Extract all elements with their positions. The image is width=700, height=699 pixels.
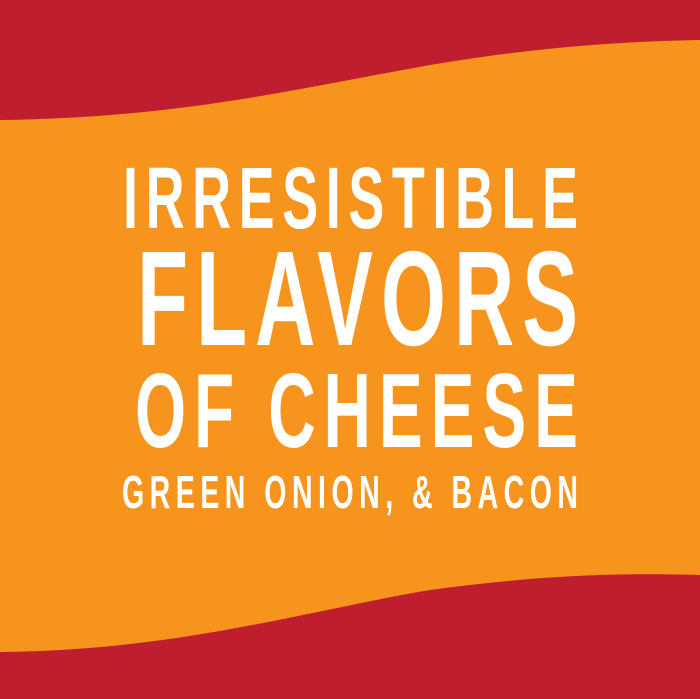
bottom red wave [0,574,700,699]
headline text [122,150,578,519]
line 4: GREEN ONION, & BACON: GREEN ONION, & BACON [122,467,578,519]
top red wave [0,0,700,120]
line 2: FLAVORS: FLAVORS [137,222,578,374]
line 1: IRRESISTIBLE: IRRESISTIBLE [123,150,578,247]
line 3: OF CHEESE: OF CHEESE [135,351,578,470]
